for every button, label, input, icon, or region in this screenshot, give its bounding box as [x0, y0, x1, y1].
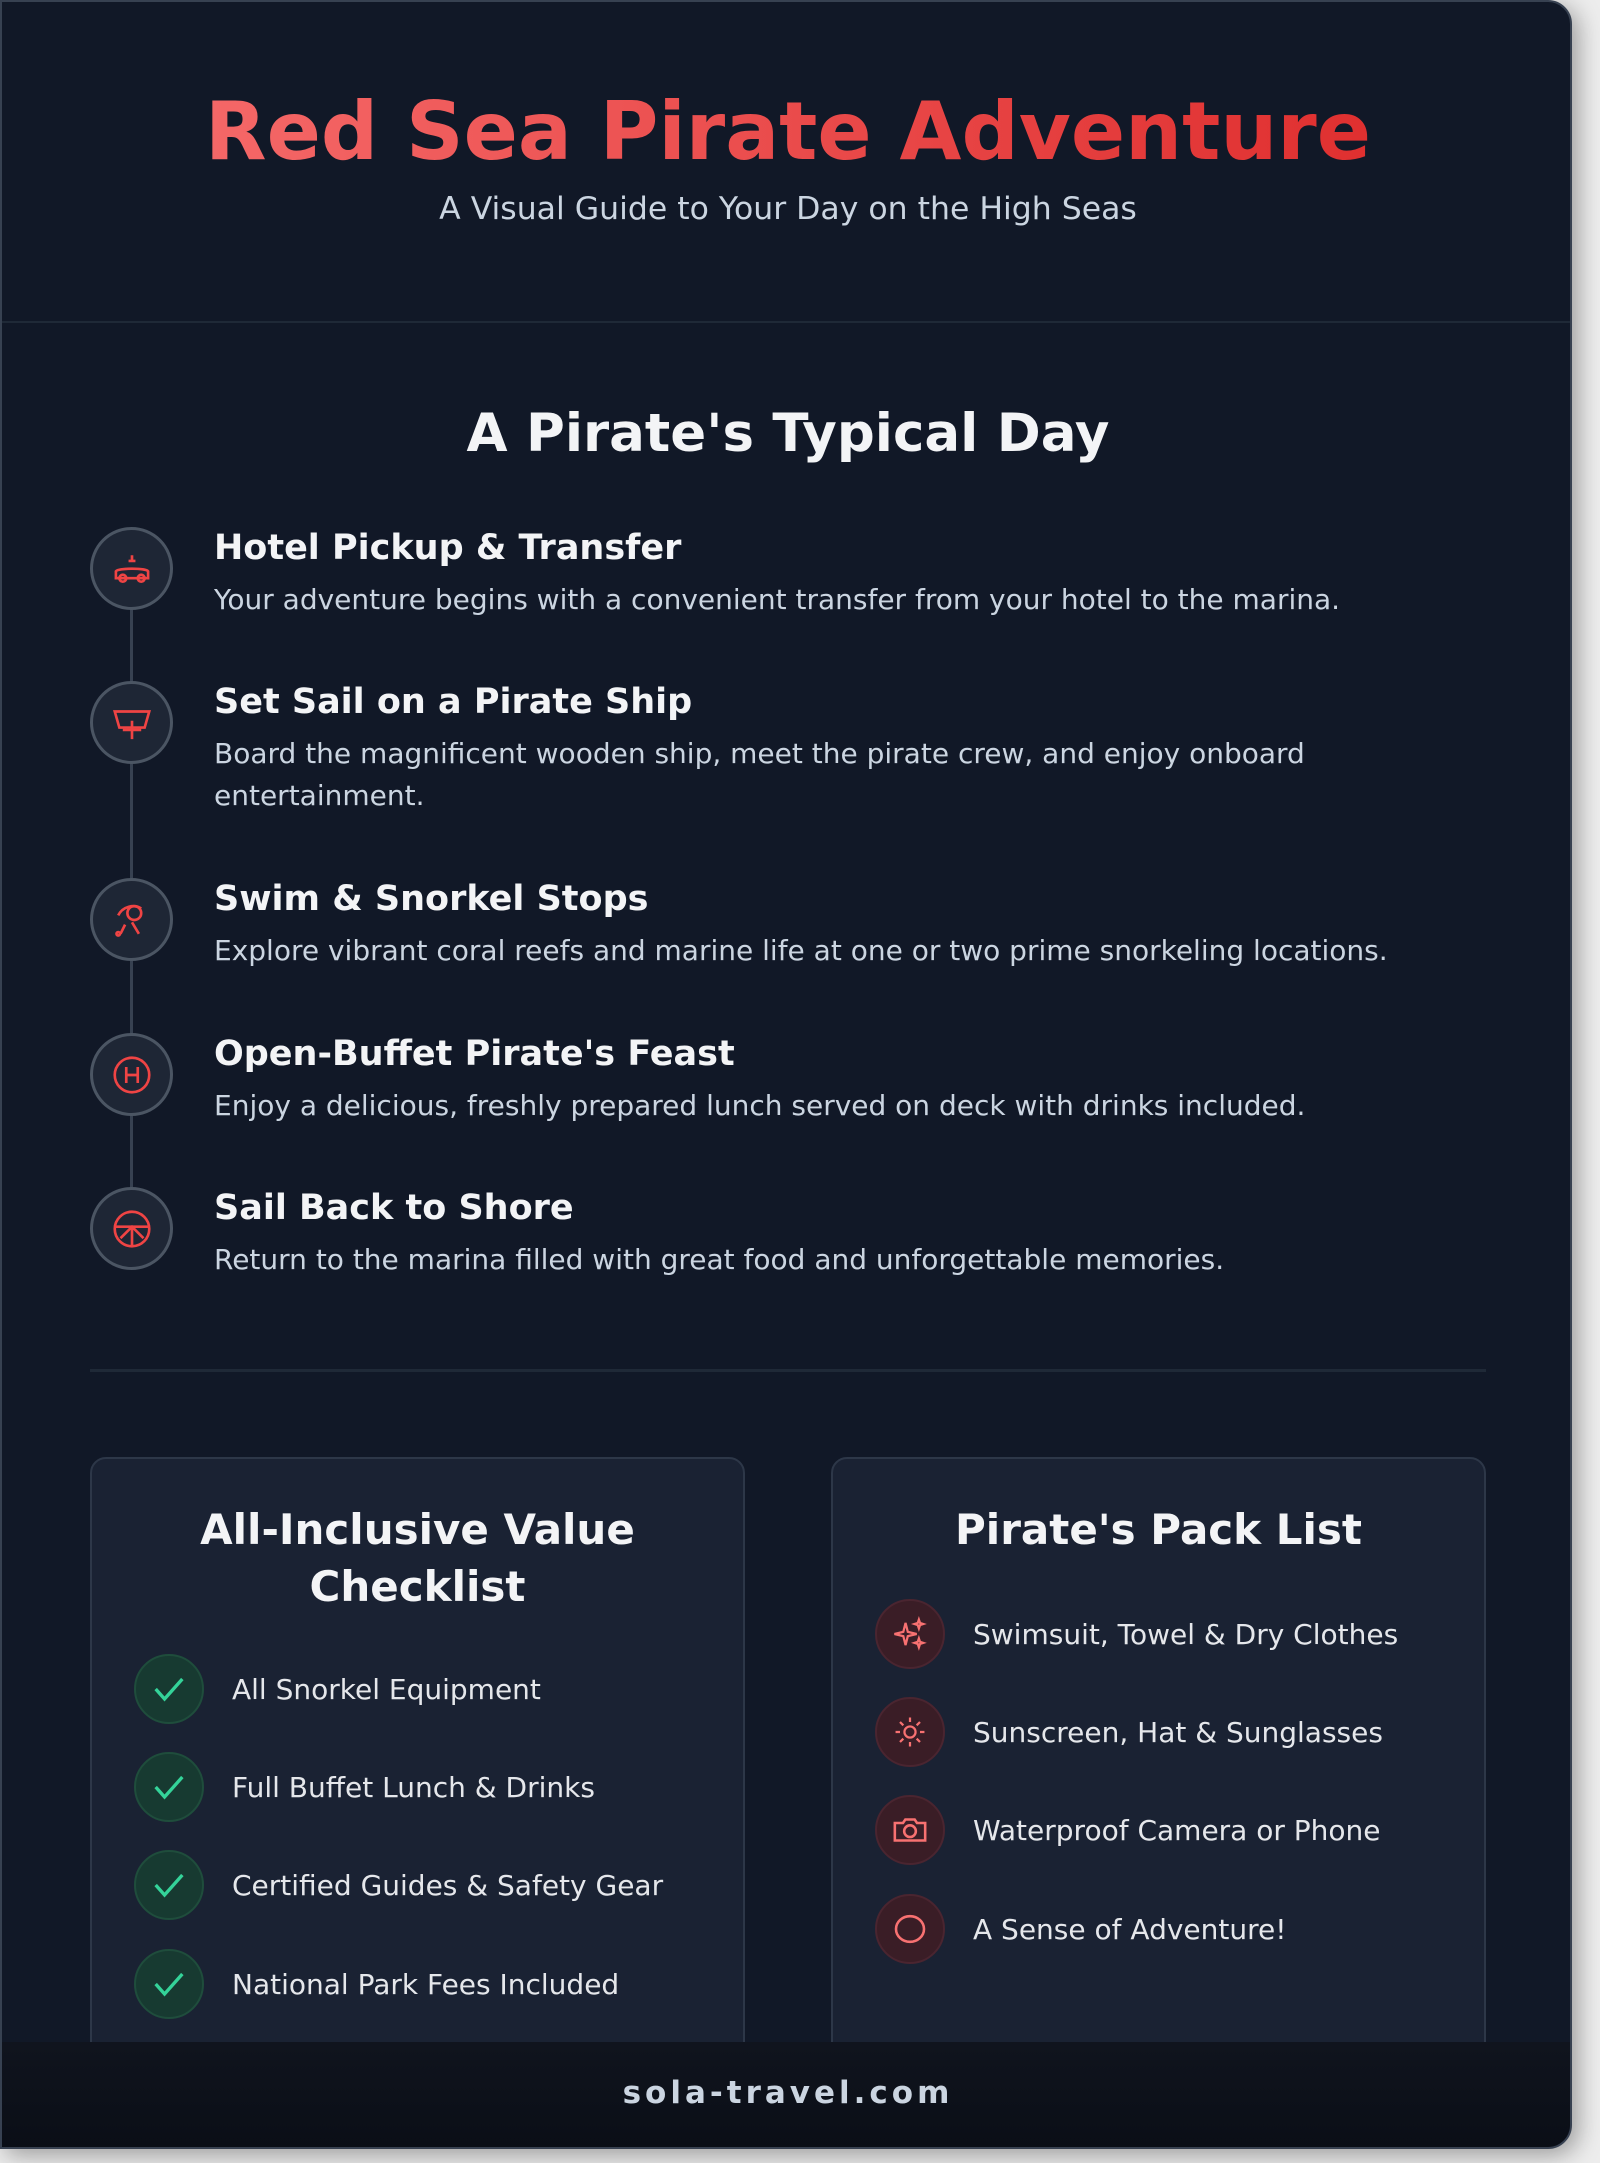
- step 2: Board the magnificent wooden ship, meet the pirate crew, and enjoy onboard entertainment.: [214, 737, 1305, 812]
- step 2: Set Sail on a Pirate Ship: [214, 682, 692, 722]
- item: swimsuit: [875, 1599, 1398, 1669]
- checklist heading: [200, 1505, 635, 1611]
- item: swimsuit: Swimsuit, Towel & Dry Clothes: [973, 1618, 1398, 1650]
- step 5: Sail Back to Shore: [214, 1188, 574, 1228]
- step 4: Open-Buffet Pirate's Feast: [214, 1034, 735, 1074]
- checklist heading: Checklist: [310, 1562, 525, 1611]
- title: Red Sea Pirate Adventure: [205, 85, 1371, 178]
- step 5: Return to the marina filled with great food and unforgettable memories.: [214, 1243, 1224, 1276]
- step 1: Hotel Pickup & Transfer: [214, 528, 681, 568]
- item: snorkel: All Snorkel Equipment: [232, 1672, 541, 1706]
- step 3: Swim & Snorkel Stops: [214, 879, 648, 919]
- icon: swim: [90, 878, 173, 961]
- item: sun: Sunscreen, Hat & Sunglasses: [973, 1716, 1383, 1748]
- item: fees: [134, 1949, 619, 2019]
- step 2: [214, 682, 1305, 812]
- icon: feast: [90, 1033, 173, 1116]
- icon: ship: [90, 681, 173, 764]
- icon: car: [90, 527, 173, 610]
- step 3: [214, 879, 1388, 967]
- item: adventure: [875, 1894, 1286, 1964]
- item: adventure: A Sense of Adventure!: [973, 1912, 1286, 1946]
- icon: helm: [90, 1187, 173, 1270]
- timeline: [90, 527, 1388, 1276]
- item: buffet: [134, 1752, 595, 1822]
- checklist heading: All-Inclusive Value: [200, 1505, 635, 1554]
- item: snorkel: [134, 1654, 541, 1724]
- pack list heading: Pirate's Pack List: [955, 1505, 1362, 1554]
- panel: checklist: [90, 1457, 745, 2077]
- item: guides: [134, 1850, 664, 1920]
- item: guides: Certified Guides & Safety Gear: [232, 1868, 663, 1902]
- step 3: Explore vibrant coral reefs and marine life at one or two prime snorkeling locations.: [214, 934, 1388, 967]
- item: sun: [875, 1697, 1383, 1767]
- section heading: A Pirate's Typical Day: [467, 403, 1109, 464]
- step 4: [214, 1034, 1305, 1122]
- title: [2, 82, 1574, 182]
- item: buffet: Full Buffet Lunch & Drinks: [232, 1770, 595, 1804]
- subtitle: A Visual Guide to Your Day on the High Seas: [439, 191, 1137, 227]
- footer: sola-travel.com: [623, 2075, 953, 2111]
- step 5: [214, 1188, 1224, 1276]
- panel: pack list: [831, 1457, 1486, 2077]
- item: camera: Waterproof Camera or Phone: [973, 1814, 1381, 1846]
- item: fees: National Park Fees Included: [232, 1968, 619, 2000]
- step 4: Enjoy a delicious, freshly prepared lunch served on deck with drinks included.: [214, 1089, 1305, 1122]
- step 1: Your adventure begins with a convenient transfer from your hotel to the marina.: [214, 583, 1340, 616]
- item: camera: [875, 1795, 1381, 1865]
- footer: [2, 2042, 1574, 2152]
- step 1: [214, 528, 1340, 616]
